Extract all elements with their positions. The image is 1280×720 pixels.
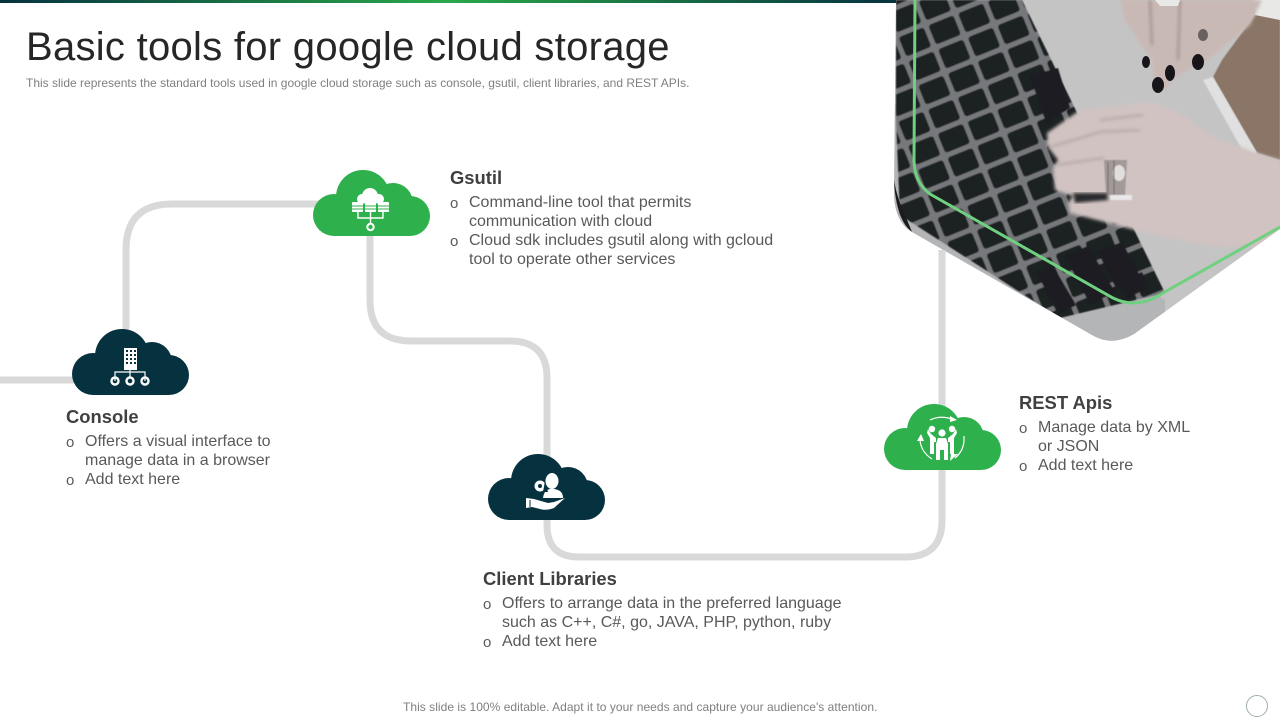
icon: gsutil cloud <box>313 170 430 236</box>
sleeve <box>1255 0 1280 20</box>
bullet list: gsutil: communication with cloud <box>469 213 652 230</box>
bullet list: client libraries: Add text here <box>502 633 597 650</box>
ring top <box>1155 0 1180 6</box>
text block: client libraries <box>483 568 841 651</box>
bullet list: rest apis: Add text here <box>1038 457 1133 474</box>
dark gap between fingers <box>1073 193 1108 203</box>
text block: gsutil <box>450 167 773 268</box>
heading: gsutil: Gsutil <box>450 167 502 188</box>
brown background corner <box>1213 15 1280 160</box>
bullet list: gsutil: Cloud sdk includes gsutil along with gcloud <box>469 232 773 249</box>
bullet list: client libraries: such as C++, C#, go, JAVA, PHP, python, ruby <box>502 614 831 631</box>
page marker circle <box>1246 695 1268 717</box>
finger shadows <box>1050 115 1143 165</box>
keyboard <box>896 0 1165 318</box>
bullet list: console: Add text here <box>85 471 180 488</box>
heading: client libraries: Client Libraries <box>483 568 617 589</box>
text block: rest apis <box>1019 392 1190 475</box>
bullet list: console <box>66 433 271 489</box>
bullet list: rest apis: o <box>1019 458 1027 475</box>
ring <box>1104 160 1132 200</box>
bullet list: console: manage data in a browser <box>85 452 270 469</box>
bullet list: rest apis: Manage data by XML <box>1038 419 1190 436</box>
photo: hands typing on laptop <box>894 0 1280 341</box>
top accent bar <box>0 0 896 3</box>
icon: console cloud <box>72 329 189 395</box>
heading: rest apis: REST Apis <box>1019 392 1112 413</box>
bullet list: client libraries: o <box>483 596 491 613</box>
bullet list: console: o <box>66 434 74 451</box>
title: Basic tools for google cloud storage <box>26 25 670 69</box>
upper hand <box>1120 0 1262 90</box>
bullet list: client libraries: Offers to arrange data in the preferred language <box>502 595 841 612</box>
bullet list: gsutil: o <box>450 233 458 250</box>
bullet list: rest apis: or JSON <box>1038 438 1099 455</box>
finger creases <box>1150 0 1180 60</box>
bullet list: client libraries: o <box>483 634 491 651</box>
bullet list: rest apis: o <box>1019 420 1027 437</box>
lower hand <box>1047 102 1280 247</box>
subtitle: This slide represents the standard tools used in google cloud storage such as console, gsutil, client libraries, and REST APIs. <box>26 76 689 90</box>
bullet list: gsutil <box>450 194 773 268</box>
bullet list: gsutil: tool to operate other services <box>469 251 675 268</box>
bullet list: gsutil: o <box>450 195 458 212</box>
icon: client libraries cloud <box>488 454 605 520</box>
bullet list: console: o <box>66 472 74 489</box>
large dark keys <box>1030 68 1148 314</box>
laptop base <box>890 100 1165 345</box>
bullet list: client libraries <box>483 595 841 651</box>
icon: rest apis cloud <box>884 404 1001 470</box>
bullet list: gsutil: Command-line tool that permits <box>469 194 691 211</box>
footer note: This slide is 100% editable. Adapt it to your needs and capture your audience's attention. <box>403 700 877 714</box>
text block: console <box>66 406 271 489</box>
bullet list: console: Offers a visual interface to <box>85 433 271 450</box>
bullet list: rest apis <box>1019 419 1190 475</box>
black nails <box>1142 29 1208 93</box>
heading: console: Console <box>66 406 139 427</box>
